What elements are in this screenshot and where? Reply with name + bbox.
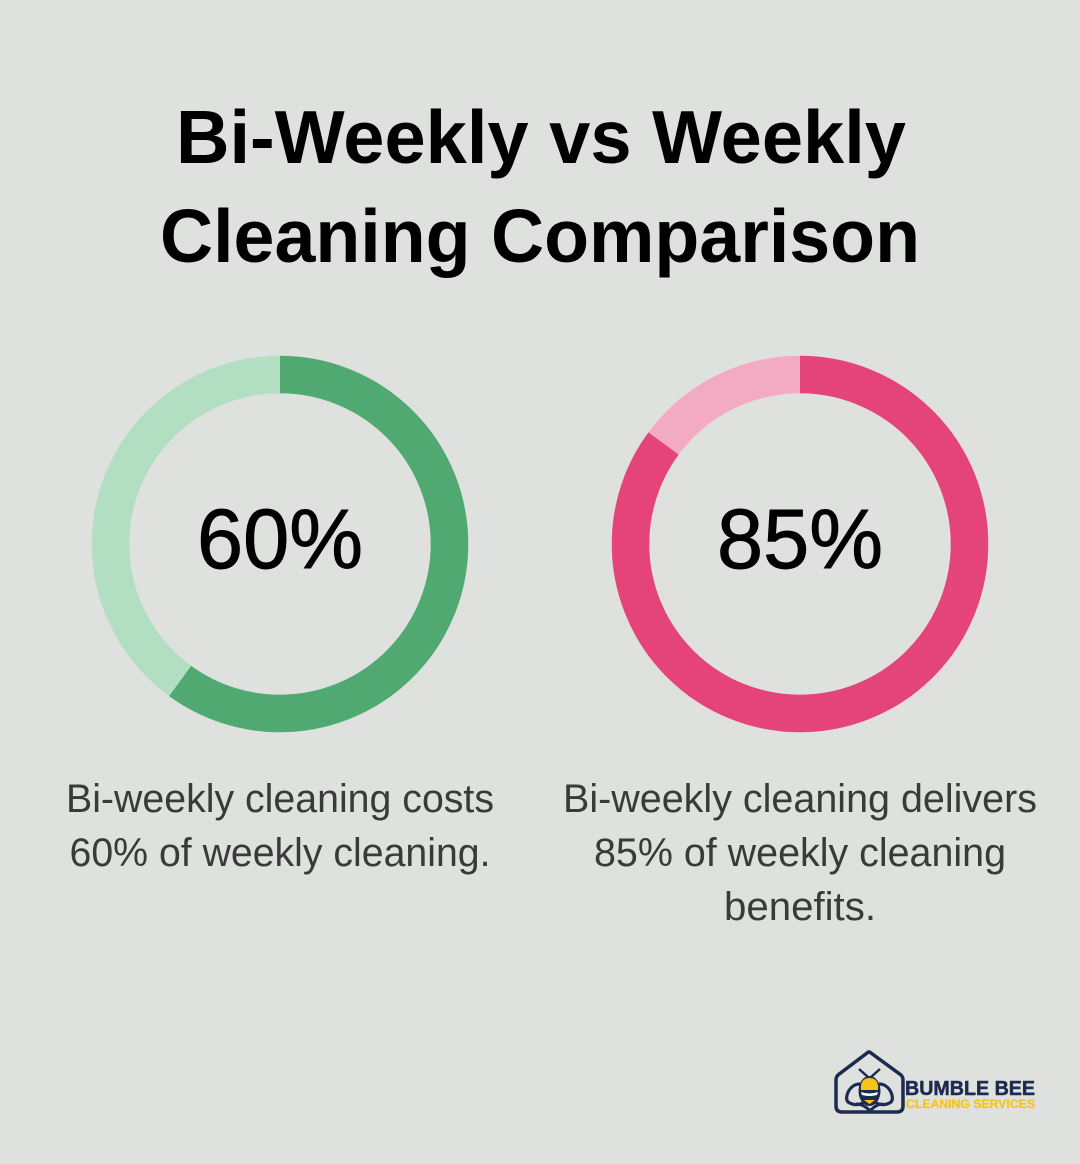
description: benefits [563, 777, 1037, 929]
icon: house with bee [836, 1052, 903, 1112]
value: 60%: 60% [197, 492, 363, 586]
title [160, 95, 920, 278]
panel: 60% cost [66, 374, 494, 875]
donut chart: 60% [110, 374, 450, 714]
logo tagline: CLEANING SERVICES [906, 1099, 1035, 1111]
description: cost: Bi-weekly cleaning costs [66, 777, 494, 821]
logo wordmark: BUMBLE BEE [905, 1078, 1035, 1100]
description: benefits: Bi-weekly cleaning delivers [563, 777, 1037, 821]
donut chart: 85% [630, 374, 970, 714]
title: Cleaning Comparison [160, 194, 920, 278]
description: cost: 60% of weekly cleaning. [70, 831, 490, 875]
value: 85%: 85% [717, 492, 883, 586]
description: cost [66, 777, 494, 875]
description: benefits: benefits. [724, 885, 876, 929]
logo: Bumble Bee Cleaning Services [836, 1052, 1035, 1112]
description: benefits: 85% of weekly cleaning [594, 831, 1006, 875]
panel: 85% benefits [563, 374, 1037, 929]
title: Bi-Weekly vs Weekly [176, 95, 906, 179]
